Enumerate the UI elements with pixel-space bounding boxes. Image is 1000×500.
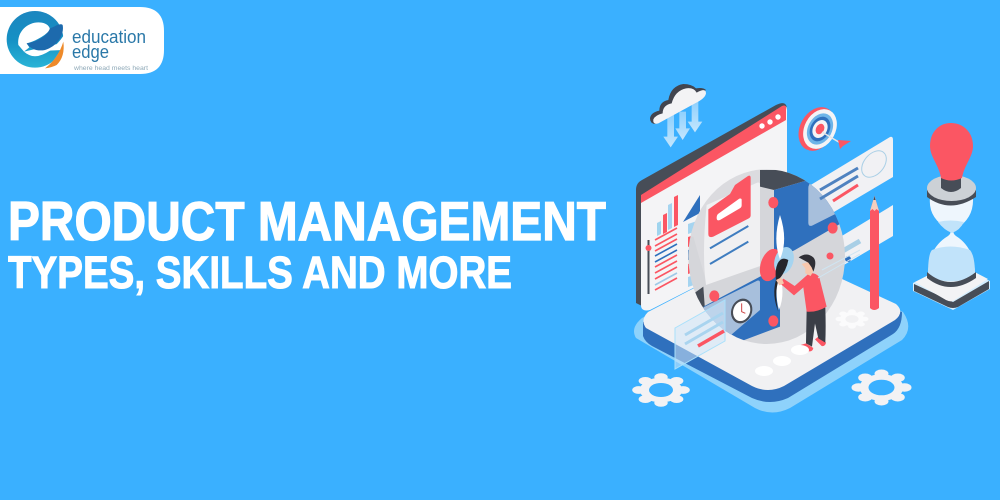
illustration: product management isometric scene (632, 84, 990, 412)
dark arc (760, 170, 806, 190)
platform gear (836, 309, 868, 329)
magnifier disc (688, 170, 845, 352)
clock icon (727, 295, 756, 327)
target icon (791, 101, 851, 157)
window panel (636, 103, 787, 310)
stepping stones (755, 345, 809, 376)
blue field (703, 180, 847, 347)
title: PRODUCT MANAGEMENT (8, 190, 606, 252)
slider (646, 240, 652, 294)
logo tagline: where head meets heart (73, 66, 148, 72)
upper glass card (808, 137, 893, 226)
pencil (870, 196, 879, 310)
light bulb (930, 123, 973, 180)
page (704, 183, 760, 285)
bar chart (657, 195, 700, 236)
hourglass glass (927, 198, 976, 287)
front glass card (675, 300, 725, 369)
lower card controls (818, 250, 860, 278)
logo wordmark: education (72, 27, 146, 47)
upper right card (808, 184, 835, 226)
platform (634, 250, 908, 412)
hourglass with light bulb (913, 123, 990, 310)
subtitle: TYPES, SKILLS AND MORE (8, 247, 512, 298)
gear left (632, 373, 690, 407)
icon: swirl e (7, 11, 68, 71)
logo: education edge: edge (72, 42, 109, 62)
person (776, 254, 827, 351)
lower glass card (807, 205, 893, 285)
folder icon (708, 176, 751, 237)
hourglass cap (927, 175, 976, 206)
hourglass base (913, 264, 990, 310)
colour swatches (688, 221, 697, 287)
gear right (852, 370, 912, 406)
list lines (655, 228, 677, 290)
cloud with arrows (650, 84, 706, 147)
clock card (703, 280, 760, 334)
red dots (709, 197, 838, 327)
upper card lines (820, 168, 858, 201)
logo: education edge (0, 7, 164, 74)
needle compass (756, 215, 797, 312)
